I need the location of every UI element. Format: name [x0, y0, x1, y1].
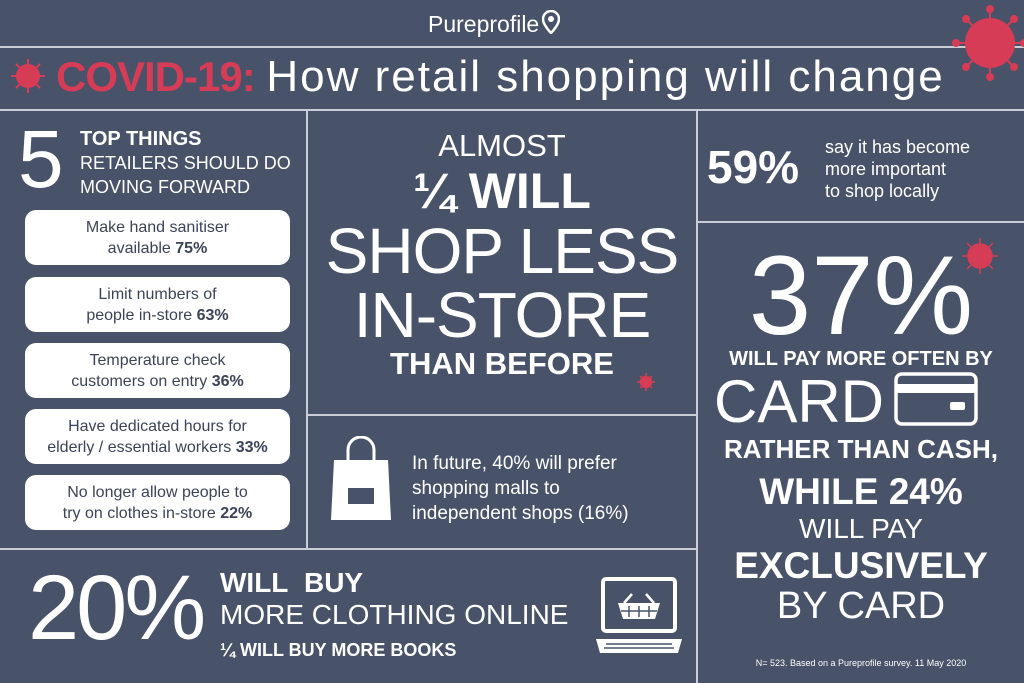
panel: online: 20% [28, 557, 203, 659]
panel: card payments: EXCLUSIVELY [734, 545, 988, 586]
panel: top things [18, 114, 291, 205]
icon: virus large [952, 5, 1024, 81]
text: Have dedicated hours for [68, 418, 247, 434]
text: Temperature check [89, 352, 226, 368]
panel: shop less: ¼ WILL [413, 163, 591, 219]
text: malls: independent shops (16%) [412, 503, 629, 524]
text: ¼ WILL BUY MORE BOOKS [220, 640, 456, 660]
list items [25, 210, 290, 265]
heading: RETAILERS SHOULD DO [80, 153, 291, 173]
logo: Pureprofile [428, 11, 539, 37]
panel: card payments: CARD [714, 368, 884, 435]
icon: shopping bag [331, 436, 391, 520]
text: elderly / essential workers 33% [47, 438, 268, 456]
icon: virus mid [962, 238, 998, 274]
icon: small virus [637, 373, 655, 391]
text: Limit numbers of [98, 286, 217, 302]
panel: card payments: WILL PAY MORE OFTEN BY [729, 348, 993, 370]
panel: card payments: WHILE 24% [759, 471, 963, 512]
text: people in-store 63% [86, 306, 229, 324]
text: customers on entry 36% [71, 372, 244, 390]
panel: shop less [326, 128, 678, 381]
panel: shop less: THAN BEFORE [390, 346, 614, 381]
heading: TOP THINGS [80, 128, 202, 150]
text: malls [412, 453, 629, 524]
title: COVID-19: How retail shopping will change [56, 52, 945, 101]
panel: card payments [714, 233, 998, 627]
stat: 59%: 59% [707, 141, 799, 193]
text: malls: In future, 40% will prefer [412, 453, 617, 474]
panel: shop less: SHOP LESS [326, 215, 678, 287]
text: say it has become [825, 137, 970, 157]
list items: Make hand sanitiser [86, 218, 229, 236]
text: malls: shopping malls to [412, 478, 560, 499]
panel: shop less: ALMOST [438, 128, 566, 163]
text: try on clothes in-store 22% [63, 504, 252, 522]
panel: card payments: WILL PAY [799, 513, 923, 544]
text: more important [825, 159, 946, 179]
footnote: N= 523. Based on a Pureprofile survey. 11 May 2020 [756, 658, 966, 668]
heading: MOVING FORWARD [80, 177, 250, 197]
text: WILL BUY [220, 567, 363, 598]
text: to shop locally [825, 181, 939, 201]
big 5: 5 [18, 114, 64, 205]
panel: shop less: IN-STORE [354, 279, 650, 351]
panel: card payments: 37% [749, 233, 973, 358]
text: MORE CLOTHING ONLINE [220, 599, 568, 630]
heading [80, 128, 291, 197]
text: No longer allow people to [67, 484, 248, 500]
panel: card payments: BY CARD [777, 585, 945, 627]
panel: card payments: RATHER THAN CASH, [724, 434, 998, 464]
icon: laptop basket [596, 577, 682, 653]
list items: available 75% [108, 240, 207, 256]
